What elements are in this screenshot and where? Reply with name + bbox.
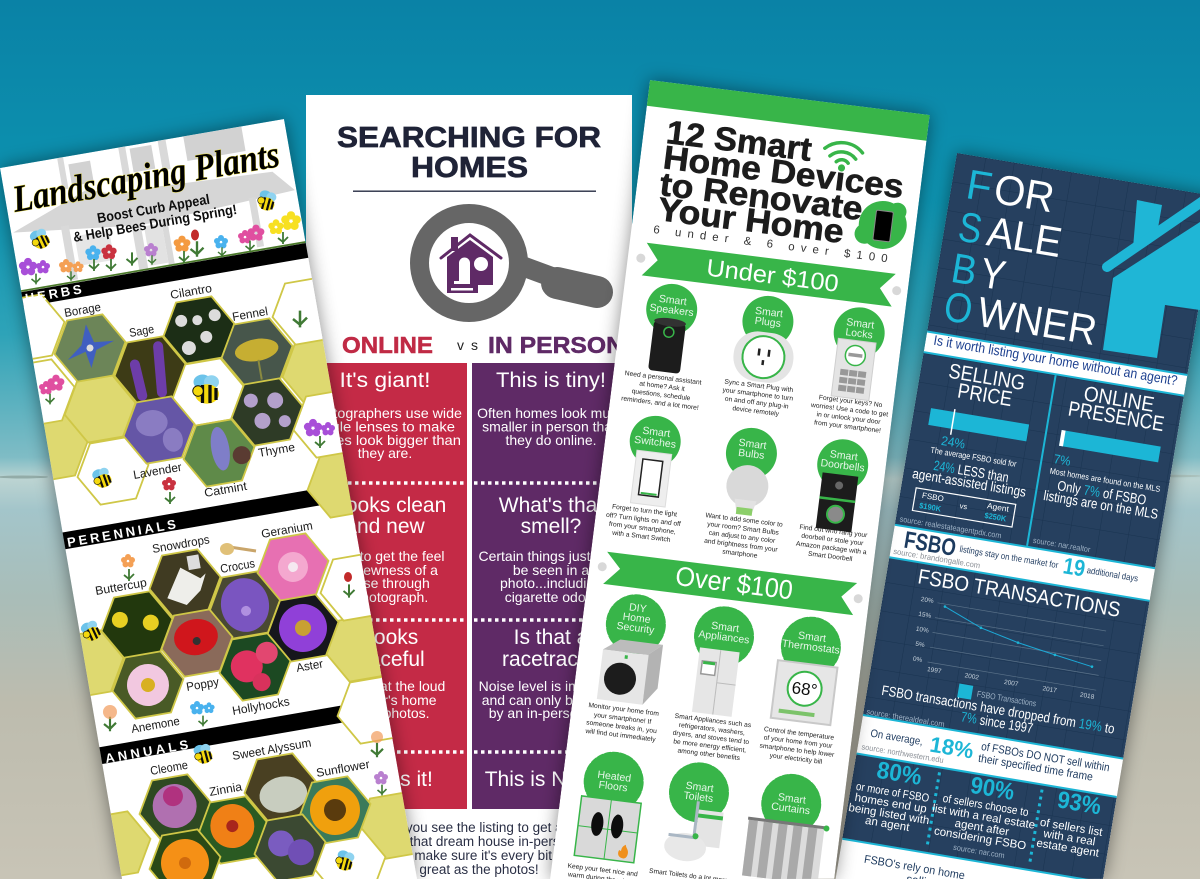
block: selling price: source: realestateagentpdx.com bbox=[899, 515, 1002, 540]
device: smart switches bbox=[603, 411, 694, 545]
device: smart speakers: at home? Ask it bbox=[639, 380, 685, 393]
photo: cilantro bbox=[162, 286, 236, 364]
device: smart switches: off? Turn lights on and off bbox=[606, 512, 681, 528]
block: online presence: source: nar.realtor bbox=[1032, 536, 1091, 554]
block: looks clean and new: house through bbox=[340, 575, 430, 591]
block: selling price: SELLING bbox=[947, 360, 1027, 395]
subtitle: & Help Bees During Spring! bbox=[72, 201, 238, 245]
line chart: fsbo transactions: 5% bbox=[915, 641, 925, 649]
ribbon: over $100: Over $100 bbox=[674, 561, 795, 605]
photo: poppy: Poppy bbox=[185, 675, 220, 694]
photo: sweet alyssum: Sweet Alyssum bbox=[231, 736, 312, 763]
stat: 80 percent: homes end up bbox=[854, 792, 928, 816]
device: smart locks: Smart bbox=[846, 317, 875, 332]
device: smart switches: Smart bbox=[642, 426, 671, 440]
band label: herbs: HERBS bbox=[24, 281, 83, 306]
stat: 80 percent bbox=[846, 753, 938, 837]
device: smart switches: from your smartphone, bbox=[608, 521, 676, 536]
block: selling price: 24% bbox=[940, 433, 967, 452]
heading: in person: IN PERSON bbox=[488, 332, 624, 358]
photo: sunflower bbox=[299, 762, 372, 844]
block: is that a racetrack: and can only be heard bbox=[482, 692, 620, 708]
title: searching for homes: HOMES bbox=[411, 152, 528, 184]
photo: snowdrops: Snowdrops bbox=[151, 532, 211, 556]
stat: 80 percent: being listed with bbox=[848, 802, 930, 827]
block: selling price: FSBO bbox=[921, 491, 944, 503]
device: smart doorbells: Doorbells bbox=[820, 458, 865, 474]
block: what's that smell bbox=[478, 494, 624, 605]
stat: 90 percent: agent after bbox=[954, 818, 1010, 839]
block: looks clean and new bbox=[324, 494, 446, 605]
device: smart plugs: Smart bbox=[754, 306, 784, 320]
block: it's giant bbox=[308, 369, 462, 461]
device: smart plugs: your smartphone to turn bbox=[722, 387, 794, 403]
block: it's giant: Photographers use wide bbox=[308, 405, 462, 421]
photo: crocus bbox=[210, 561, 279, 638]
block: looks clean and new: Hard to get the feel bbox=[325, 548, 445, 564]
block: selling price: Agent bbox=[986, 501, 1010, 514]
device: diy home security: will find out immediately bbox=[584, 728, 657, 744]
section: herbs honeycomb bbox=[22, 278, 354, 519]
block: selling price: 24% LESS than bbox=[932, 457, 1010, 485]
device: smart appliances: Smart Appliances such as bbox=[674, 713, 752, 729]
flower row and bees bbox=[19, 189, 301, 284]
title: 12 smart home devices bbox=[655, 113, 909, 257]
stat strip: 19 additional days: source: brandongalle.com bbox=[893, 547, 981, 570]
device: smart doorbells: doorbell or stole your bbox=[801, 533, 864, 547]
line chart: fsbo transactions: 15% bbox=[918, 611, 932, 620]
device: smart appliances: dryers, and stoves tend to bbox=[672, 730, 750, 746]
block: online presence: Only 7% of FSBO bbox=[1056, 477, 1148, 508]
block: looks peaceful: neighbor's home bbox=[333, 692, 437, 708]
panel: fsbo for sale by owner bbox=[835, 153, 1200, 879]
ribbon: under $100 bbox=[634, 242, 903, 308]
photo: snowdrops bbox=[148, 537, 222, 618]
device: heated floors bbox=[566, 750, 652, 879]
stat: 90 percent: considering FSBO bbox=[933, 825, 1027, 853]
device: smart thermostats bbox=[758, 614, 851, 767]
line chart: fsbo transactions: 20% bbox=[920, 596, 934, 605]
block: looks clean and new: a photograph. bbox=[342, 589, 428, 605]
device: smart switches: Switches bbox=[634, 435, 677, 451]
block: is that a racetrack bbox=[479, 626, 623, 721]
title: for sale by owner: OR bbox=[991, 165, 1058, 221]
device: smart locks: from your smartphone! bbox=[814, 419, 881, 435]
device: smart bulbs: smartphone bbox=[722, 549, 758, 560]
block: this is tiny: they do online. bbox=[505, 432, 597, 448]
stat: 93 percent: estate agent bbox=[1035, 837, 1101, 860]
title: for sale by owner: ALE bbox=[984, 207, 1065, 266]
title: for sale by owner: S bbox=[955, 203, 986, 253]
device: smart speakers: Need a personal assistant bbox=[624, 370, 702, 387]
title: 12 smart home devices: to Renovate bbox=[658, 165, 865, 227]
closing text bbox=[365, 820, 575, 877]
block: this is tiny bbox=[477, 369, 625, 448]
device: smart locks: worries! Use a code to get bbox=[810, 402, 889, 419]
title: for sale by owner: F bbox=[963, 160, 996, 211]
block: miss it: Dismiss it! bbox=[337, 768, 433, 791]
photo: calendula bbox=[148, 828, 222, 879]
block: selling price: agent-assisted listings bbox=[911, 465, 1027, 500]
block: selling price: The average FSBO sold for bbox=[930, 445, 1017, 469]
device: heated floors: Floors bbox=[598, 780, 628, 794]
ribbon: over $100 bbox=[596, 551, 865, 616]
block: this is tiny: Often homes look much bbox=[477, 405, 625, 421]
photo: hollyhocks bbox=[218, 633, 292, 715]
device: smart thermostats: Control the temperature bbox=[764, 726, 835, 742]
device: smart thermostats: your electricity bill bbox=[769, 752, 823, 766]
device: smart toilets bbox=[649, 760, 742, 879]
photo: borage bbox=[54, 304, 126, 382]
photo: poppy bbox=[160, 608, 234, 691]
stat: 93 percent bbox=[1035, 784, 1110, 860]
device: diy home security: your smartphone! If bbox=[594, 712, 652, 726]
section: perennials honeycomb bbox=[80, 543, 392, 745]
block: looks peaceful: isn't in photos. bbox=[340, 705, 430, 721]
stat: 90 percent: source: nar.com bbox=[953, 843, 1006, 860]
icon: smartphone on green blob bbox=[853, 198, 910, 252]
block: looks clean and new: the newness of a bbox=[332, 562, 438, 578]
photo: buttercup: Buttercup bbox=[94, 575, 148, 598]
device: smart curtains: Smart bbox=[777, 792, 806, 807]
stat strip: 19 additional days: listings stay on the market for bbox=[959, 544, 1059, 570]
block: looks peaceful bbox=[325, 626, 445, 721]
block: what's that smell: cigarette odors bbox=[505, 589, 597, 605]
block: online presence: Most homes are found on the MLS bbox=[1049, 466, 1161, 494]
title: 12 smart home devices: Home Devices bbox=[661, 138, 906, 205]
device: smart locks bbox=[807, 303, 901, 435]
device: smart bulbs: Bulbs bbox=[738, 448, 765, 462]
device: heated floors: Keep your feet nice and bbox=[567, 863, 638, 878]
stat strip: 18 percent: source: northwestern.edu bbox=[861, 742, 944, 765]
photo: sweet alyssum bbox=[232, 740, 316, 820]
device: smart appliances: be more energy efficient, bbox=[673, 738, 747, 754]
icon: magnifying glass with house bbox=[420, 214, 597, 312]
block: is that a racetrack: Is that a bbox=[514, 626, 589, 649]
photo: fennel: Fennel bbox=[231, 304, 269, 324]
block: what's that smell: be seen in a bbox=[513, 562, 589, 578]
device: smart doorbells: Smart bbox=[829, 449, 858, 464]
closing text: as great as the photos! bbox=[401, 862, 539, 877]
photo: cleome: Cleome bbox=[149, 758, 189, 778]
line chart: fsbo transactions: 2007 bbox=[1003, 679, 1019, 688]
device: smart switches: with a Smart Switch bbox=[611, 530, 671, 544]
stat: 93 percent: with a real bbox=[1042, 828, 1096, 848]
title: for sale by owner: WNER bbox=[974, 288, 1100, 354]
line chart: fsbo transactions: 0% bbox=[912, 656, 923, 664]
device: smart bulbs: Want to add some color to bbox=[705, 512, 783, 529]
stat: 90 percent bbox=[926, 766, 1042, 864]
title: searching for homes: SEARCHING FOR bbox=[337, 122, 601, 154]
photo: zinnia: Zinnia bbox=[208, 779, 243, 799]
panel: landscaping plants bbox=[0, 110, 427, 879]
device: heated floors: Heated bbox=[597, 770, 632, 785]
device: smart speakers: Smart bbox=[658, 294, 687, 308]
stat: 90 percent: 90% bbox=[969, 772, 1016, 806]
block: is that a racetrack: Noise level is important bbox=[479, 678, 623, 694]
photo: zinnia bbox=[199, 783, 266, 865]
photo: hollyhocks: Hollyhocks bbox=[231, 694, 291, 718]
block: looks peaceful: peaceful bbox=[345, 648, 425, 671]
block: looks clean and new: It looks clean bbox=[324, 494, 446, 517]
photo: thyme: Thyme bbox=[257, 440, 296, 460]
block: online presence bbox=[1033, 386, 1164, 552]
photo: lavender bbox=[124, 395, 196, 479]
stat: 80 percent: 80% bbox=[875, 757, 924, 791]
block: looks peaceful: It looks bbox=[352, 626, 418, 649]
block: selling price: $250K bbox=[984, 511, 1007, 524]
stat: 90 percent: list with a real estate bbox=[931, 803, 1036, 832]
line chart: fsbo transactions: 2017 bbox=[1042, 685, 1058, 695]
title: searching for homes bbox=[337, 122, 601, 184]
photo: crocus: Crocus bbox=[219, 556, 256, 576]
closing text: idea of that dream house in-person bbox=[365, 834, 575, 849]
block: online presence: listings are on the MLS bbox=[1042, 487, 1159, 522]
block: selling price bbox=[900, 364, 1030, 538]
stat strip: 18 percent bbox=[861, 721, 1111, 792]
photo: sunflower: Sunflower bbox=[315, 757, 371, 780]
photo: fennel bbox=[221, 306, 294, 384]
stat: 93 percent: 93% bbox=[1055, 786, 1103, 820]
device: smart appliances: refrigerators, washers, bbox=[678, 722, 745, 737]
block: this is tiny: smaller in person than bbox=[482, 418, 620, 434]
block: online presence: 7% bbox=[1053, 451, 1072, 469]
device: smart thermostats: of your home from your bbox=[763, 735, 833, 750]
block: what's that smell: Certain things just can't bbox=[478, 548, 624, 564]
device: diy home security: Monitor your home from bbox=[588, 702, 660, 718]
block: this is tiny: This is tiny! bbox=[496, 369, 606, 392]
stat strip: 19 additional days: FSBO bbox=[902, 527, 958, 562]
block: looks clean and new: and new bbox=[345, 515, 426, 538]
closing text: Once you see the listing to get an bbox=[370, 820, 570, 835]
device: smart appliances: among other benefits bbox=[677, 747, 741, 762]
block: online presence: PRESENCE bbox=[1066, 397, 1166, 436]
panel: searching for homes bbox=[306, 95, 632, 879]
title: 12 smart home devices: Your Home bbox=[656, 190, 846, 250]
device: smart bulbs: Smart bbox=[738, 438, 767, 452]
block: what's that smell: smell? bbox=[521, 515, 581, 538]
block: is that a racetrack: by an in-person visit bbox=[489, 705, 613, 721]
subtitle: Boost Curb Appeal bbox=[96, 191, 211, 226]
heading: online: ONLINE bbox=[342, 332, 433, 358]
device: smart appliances: Smart bbox=[711, 621, 740, 635]
title: landscaping plants: Landscaping Plants bbox=[9, 134, 283, 221]
device: smart thermostats: Smart bbox=[797, 631, 827, 645]
title: for sale by owner bbox=[946, 170, 1095, 345]
device: smart doorbells: Find out who rang your bbox=[799, 524, 868, 539]
device: smart doorbells: Smart Doorbell bbox=[808, 551, 853, 563]
photo: geranium bbox=[256, 523, 330, 600]
device: smart plugs: Plugs bbox=[754, 316, 781, 330]
device: smart doorbells bbox=[795, 435, 880, 565]
device: smart locks: in or unlock your door bbox=[816, 411, 882, 426]
band label: annuals: ANNUALS bbox=[104, 737, 190, 766]
photo: cleome bbox=[138, 762, 212, 840]
device: diy home security: someone breaks in, you bbox=[586, 719, 657, 735]
photo: anemone bbox=[112, 650, 184, 733]
line chart: fsbo transactions bbox=[913, 596, 1106, 706]
photo: geranium: Geranium bbox=[260, 518, 314, 541]
column: in person bbox=[472, 363, 632, 809]
device: smart speakers bbox=[621, 279, 714, 412]
stat: 93 percent: of sellers list bbox=[1039, 817, 1104, 839]
device: smart bulbs: your room? Smart Bulbs bbox=[707, 521, 780, 537]
device: smart curtains: Curtains bbox=[770, 801, 811, 817]
block: is that a racetrack: racetrack? bbox=[502, 648, 600, 671]
device: smart curtains bbox=[741, 771, 835, 879]
device: smart locks: Forget your keys? No bbox=[818, 394, 883, 409]
photo: sage: Sage bbox=[128, 322, 155, 340]
title: for sale by owner: B bbox=[948, 244, 981, 295]
device: smart plugs bbox=[720, 292, 806, 419]
stat strip: 18 percent: On average, bbox=[870, 728, 924, 748]
photo: cilantro: Cilantro bbox=[169, 281, 213, 302]
device: smart thermostats: 68° bbox=[791, 678, 818, 700]
stat: 90 percent: of sellers choose to bbox=[942, 793, 1029, 819]
block: looks peaceful: Notice that the loud bbox=[325, 678, 445, 694]
block: online presence: ONLINE bbox=[1082, 382, 1156, 417]
panel: smart home devices bbox=[550, 80, 930, 879]
device: smart bulbs: can adjust to any color bbox=[708, 530, 776, 545]
block: it's giant: angle lenses to make bbox=[315, 418, 455, 434]
band label: perennials: PERENNIALS bbox=[66, 516, 177, 550]
device: smart thermostats: Thermostats bbox=[781, 639, 840, 657]
text: transactions have dropped: FSBO transactions have dropped from 19% to bbox=[881, 682, 1116, 737]
device: smart doorbells: Amazon package with a bbox=[796, 541, 867, 556]
line chart: fsbo transactions: 1997 bbox=[927, 666, 942, 675]
photo: purple annual bbox=[254, 813, 326, 879]
subtitle: 6 under & 6 over $100 bbox=[653, 224, 888, 265]
stat strip: 19 additional days: additional days bbox=[1086, 565, 1139, 584]
title: 12 smart home devices: 12 Smart bbox=[664, 113, 814, 168]
block: this is not it: This is NOT it! bbox=[485, 768, 617, 791]
line chart: fsbo transactions: 2002 bbox=[964, 672, 980, 682]
line chart: fsbo transactions: 10% bbox=[915, 626, 929, 635]
text: transactions have dropped: source: therealdeal.com bbox=[866, 707, 946, 729]
column: online bbox=[306, 363, 467, 809]
photo: aster bbox=[268, 594, 340, 672]
title: for sale by owner: Y bbox=[977, 249, 1009, 299]
device: smart appliances: Appliances bbox=[698, 629, 750, 646]
block: what's that smell: photo...including bbox=[500, 575, 602, 591]
device: smart bulbs: and brightness from your bbox=[704, 538, 779, 554]
block: selling price: vs bbox=[959, 501, 968, 511]
device: diy home security: Home bbox=[622, 612, 651, 626]
block: selling price: $190K bbox=[919, 501, 942, 514]
line chart: fsbo transactions: 2018 bbox=[1079, 692, 1095, 701]
device: smart plugs: device remotely bbox=[732, 405, 780, 418]
device: smart switches: Forget to turn the light bbox=[612, 503, 678, 519]
device: smart appliances bbox=[670, 604, 766, 763]
photo: catmint bbox=[182, 418, 256, 496]
photo: catmint: Catmint bbox=[203, 479, 249, 500]
device: smart plugs: Sync a Smart Plug with bbox=[724, 379, 794, 394]
photo: borage: Borage bbox=[63, 300, 102, 320]
text: transactions have dropped: 7% since 1997 bbox=[960, 708, 1035, 736]
device: smart plugs: on and off any plug-in bbox=[724, 396, 789, 411]
block: it's giant: It's giant! bbox=[340, 369, 430, 392]
device: smart speakers: Speakers bbox=[649, 303, 694, 319]
stat strip: 18 percent: 18% bbox=[928, 732, 976, 764]
photo: anemone: Anemone bbox=[130, 714, 181, 736]
stat strip: 18 percent: of FSBOs DO NOT sell within bbox=[980, 741, 1110, 774]
block: what's that smell: What's that bbox=[499, 494, 603, 517]
photo: sage bbox=[114, 326, 186, 402]
photo: buttercup bbox=[96, 580, 172, 658]
device: diy home security: DIY bbox=[628, 602, 647, 615]
stat strip: 18 percent: their specified time frame bbox=[977, 753, 1094, 784]
heading: fsbo transactions: FSBO TRANSACTIONS bbox=[916, 565, 1122, 622]
stat strip: 19 additional days bbox=[893, 531, 1138, 582]
text: transactions have dropped bbox=[866, 680, 1116, 757]
section: annuals honeycomb bbox=[110, 731, 413, 879]
line chart: fsbo transactions: FSBO Transactions bbox=[976, 689, 1037, 708]
block: selling price: PRICE bbox=[956, 379, 1014, 411]
device: smart thermostats: smartphone to help lower bbox=[759, 743, 835, 759]
device: diy home security: Security bbox=[616, 621, 656, 637]
stat strip: 19 additional days: 19 bbox=[1061, 552, 1087, 582]
icon: wifi bbox=[822, 140, 864, 172]
device: smart toilets: Toilets bbox=[683, 791, 714, 805]
device: smart speakers: reminders, and a lot more! bbox=[621, 395, 699, 412]
block: it's giant: they are. bbox=[358, 445, 412, 461]
photo: aster: Aster bbox=[295, 657, 324, 675]
photo: lavender: Lavender bbox=[132, 460, 183, 482]
block: it's giant: places look bigger than bbox=[309, 432, 461, 448]
ribbon: under $100: Under $100 bbox=[705, 255, 840, 298]
device: smart speakers: questions, schedule bbox=[631, 388, 691, 402]
device: smart bulbs bbox=[701, 423, 794, 563]
icon: house bbox=[1103, 200, 1200, 358]
label: vs: vs bbox=[457, 337, 478, 353]
closing text: and make sure it's every bit bbox=[388, 848, 552, 863]
stat: 80 percent: or more of FSBO bbox=[855, 781, 930, 805]
house illustration header bbox=[14, 126, 388, 764]
device: diy home security bbox=[584, 592, 674, 744]
photo: thyme bbox=[230, 377, 304, 457]
device: smart toilets: Smart bbox=[685, 781, 714, 795]
device: smart locks: Locks bbox=[845, 327, 873, 341]
title: for sale by owner: O bbox=[941, 282, 976, 333]
stat: 80 percent: an agent bbox=[864, 815, 911, 834]
